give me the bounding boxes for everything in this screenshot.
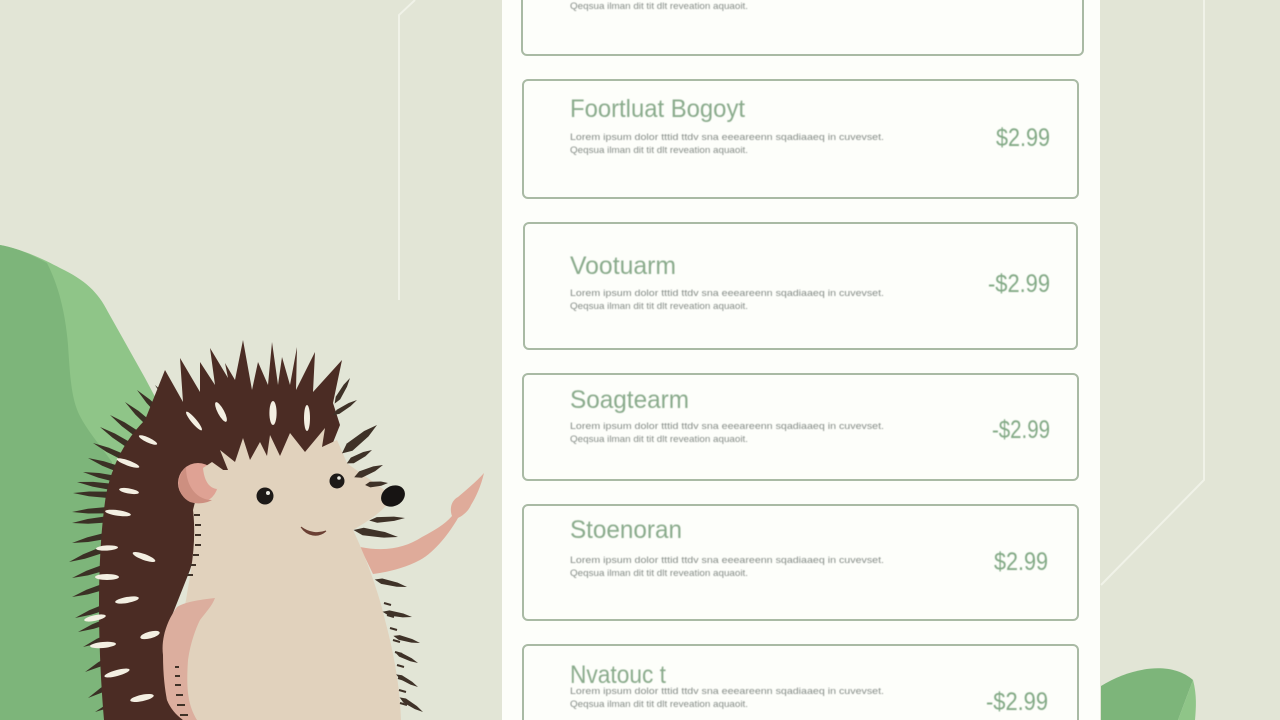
- background outline right: [1101, 0, 1204, 585]
- hedgehog: [68, 340, 484, 720]
- card 6: [523, 645, 1078, 720]
- raised arm: [360, 473, 484, 574]
- body edge serration: [187, 515, 407, 705]
- arm serration: [175, 667, 188, 715]
- brown back with top quills: [99, 340, 342, 720]
- card 6 title: Nvatouc t: [570, 661, 666, 689]
- card 5 title: Stoenoran: [570, 516, 682, 544]
- card 3 price: -$2.99: [988, 270, 1050, 298]
- smile: [301, 527, 326, 535]
- card 2 description: Qeqsua ilman dit tit dlt reveation aquaoit.: [570, 145, 748, 156]
- card 5 description: Lorem ipsum dolor tttid ttdv sna eeeareenn sqadiaaeq in cuvevset.: [570, 555, 884, 566]
- white menu panel: [502, 0, 1100, 720]
- card 4 price: -$2.99: [992, 416, 1050, 444]
- card 1: [522, 0, 1083, 55]
- lowered arm: [163, 598, 215, 720]
- bottom right leaf: [1101, 668, 1196, 720]
- background outline left: [399, 0, 415, 300]
- card 4 description: Lorem ipsum dolor tttid ttdv sna eeeareenn sqadiaaeq in cuvevset.: [570, 421, 884, 432]
- card 3: [524, 223, 1077, 349]
- card 2 description: Lorem ipsum dolor tttid ttdv sna eeeareenn sqadiaaeq in cuvevset.: [570, 132, 884, 143]
- card 3 description: [570, 288, 884, 312]
- card 3 description: Lorem ipsum dolor tttid ttdv sna eeeareenn sqadiaaeq in cuvevset.: [570, 288, 884, 299]
- left green hill: [0, 245, 170, 720]
- card 5: [523, 505, 1078, 620]
- card 4: [523, 374, 1078, 480]
- card 2: [523, 80, 1078, 198]
- card 2 title: Foortluat Bogoyt: [570, 95, 745, 123]
- cream body and face: [180, 428, 401, 720]
- card 6 description: Qeqsua ilman dit tit dlt reveation aquaoit.: [570, 699, 748, 710]
- card 2 description: [570, 132, 884, 156]
- card 5 description: Qeqsua ilman dit tit dlt reveation aquaoit.: [570, 568, 748, 579]
- card 2 price: $2.99: [996, 124, 1050, 152]
- card 4 description: [570, 421, 884, 445]
- ear: [178, 462, 226, 503]
- card 3 title: Vootuarm: [570, 252, 676, 280]
- card 4 title: Soagtearm: [570, 386, 689, 414]
- card 3 description: Qeqsua ilman dit tit dlt reveation aquaoit.: [570, 301, 748, 312]
- card 5 description: [570, 555, 884, 579]
- card 4 description: Qeqsua ilman dit tit dlt reveation aquaoit.: [570, 434, 748, 445]
- quill highlights: [84, 401, 310, 704]
- left eye: [256, 488, 274, 504]
- card 6 price: -$2.99: [986, 688, 1048, 716]
- nose: [377, 481, 409, 511]
- card 5 price: $2.99: [994, 548, 1048, 576]
- card 6 description: [570, 686, 884, 710]
- side quills: [68, 383, 187, 715]
- card 6 description: Lorem ipsum dolor tttid ttdv sna eeeareenn sqadiaaeq in cuvevset.: [570, 686, 884, 697]
- right quills: [331, 377, 424, 714]
- card 1 description: Qeqsua ilman dit tit dlt reveation aquaoit.: [570, 1, 748, 12]
- right eye: [330, 474, 344, 488]
